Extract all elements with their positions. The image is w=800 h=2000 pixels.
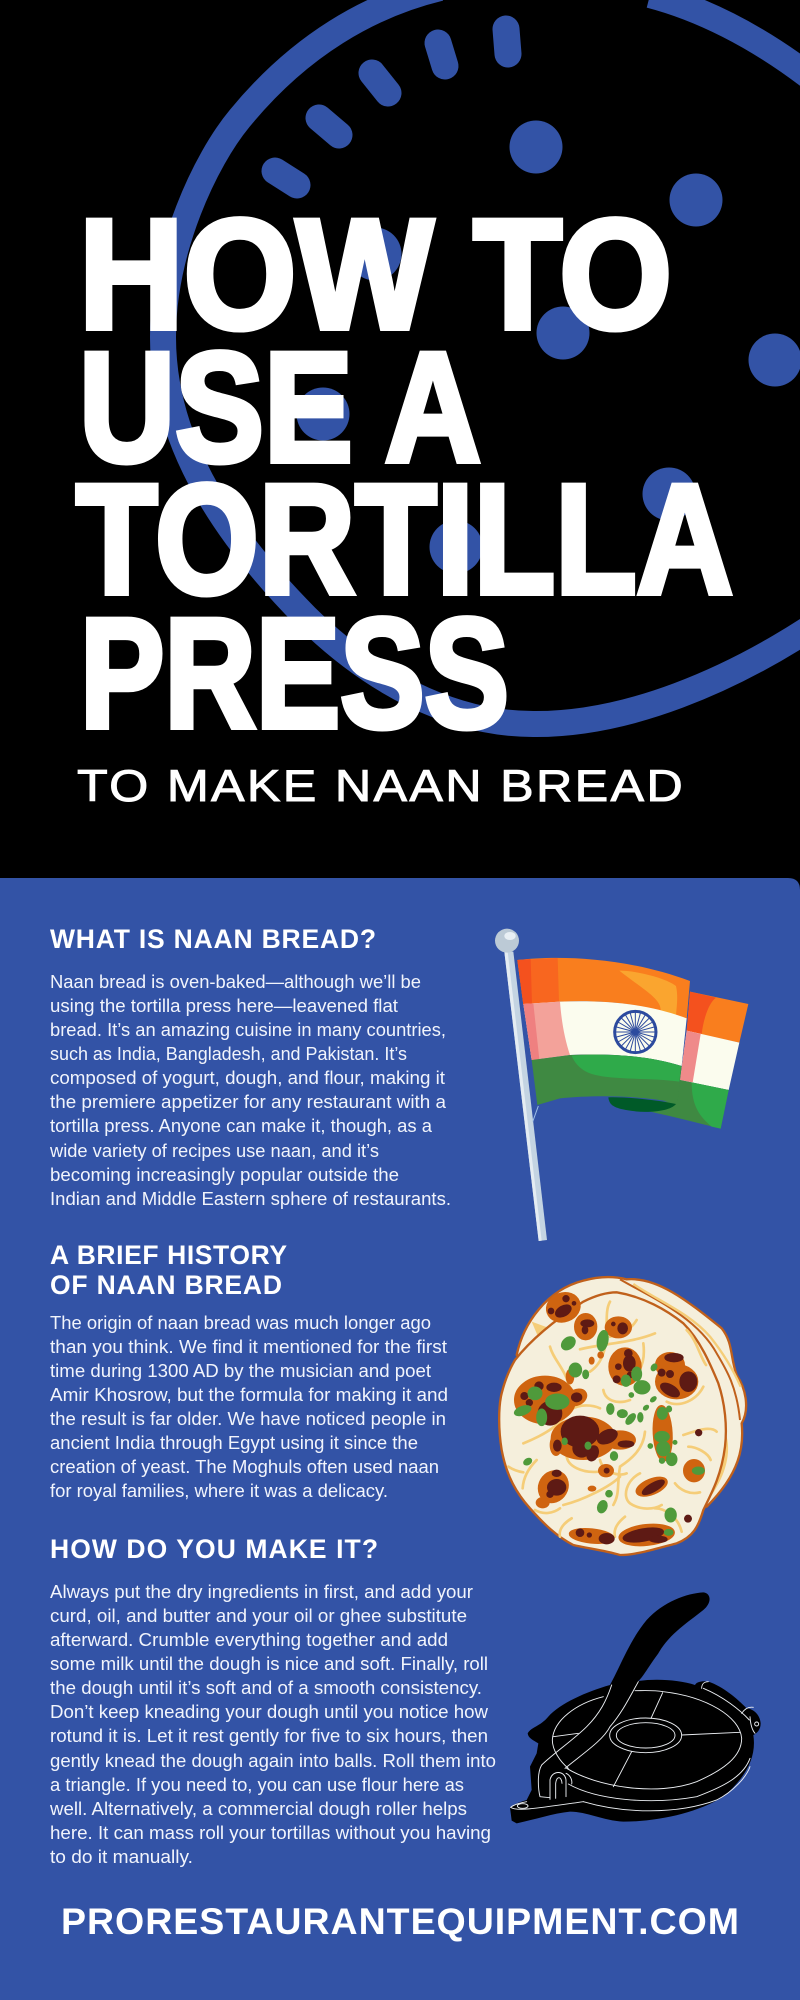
heading: a brief history of naan bread: A BRIEF HISTORY <box>50 1240 287 1270</box>
front layer of naan <box>499 1292 726 1555</box>
text block: what is naan bread: such as India, Bangladesh, and Pakistan. It’s <box>50 1043 407 1064</box>
text block: how do you make it: to do it manually. <box>50 1846 193 1867</box>
text block: what is naan bread: the premiere appetizer for any restaurant with a <box>50 1091 447 1112</box>
charred spots <box>515 1288 704 1548</box>
text block: brief history <box>50 1312 448 1501</box>
text block: how do you make it: gently knead the dough again into balls. Roll them into <box>50 1750 496 1771</box>
text block: what is naan bread <box>49 971 451 1209</box>
text block: how do you make it: here. It can mass roll your tortillas without you having <box>50 1822 491 1843</box>
text block: how do you make it: Always put the dry ingredients in first, and add your <box>50 1581 473 1602</box>
text block: what is naan bread: using the tortilla press here—leavened flat <box>50 995 398 1016</box>
herb flecks <box>513 1330 704 1535</box>
blue content panel <box>0 878 800 2000</box>
text block: what is naan bread: Indian and Middle Eastern sphere of restaurants. <box>50 1188 451 1209</box>
text block: brief history: Amir Khosrow, but the formula for making it and <box>50 1384 448 1405</box>
section: how do you make it <box>49 1534 496 1867</box>
text block: brief history: The origin of naan bread was much longer ago <box>50 1312 431 1333</box>
text block: how do you make it: some milk until the dough is nice and soft. Finally, roll <box>50 1653 488 1674</box>
back fold of flag <box>687 992 748 1043</box>
section: brief history <box>50 1240 448 1501</box>
text block: brief history: creation of yeast. The Moghuls often used naan <box>50 1456 439 1477</box>
text block: brief history: the result is far older. We have noticed people in <box>50 1408 446 1429</box>
header background <box>0 0 800 890</box>
subtitle: TO MAKE NAAN BREAD <box>77 762 685 811</box>
text block: what is naan bread: tortilla press. Anyone can make it, though, as a <box>50 1115 433 1136</box>
text block: brief history: for royal families, where it was a delicacy. <box>50 1480 388 1501</box>
title: USE A <box>79 321 481 495</box>
text block: what is naan bread: Naan bread is oven-baked—although we’ll be <box>50 971 421 992</box>
text block: how do you make it: Don’t keep kneading your dough until you notice how <box>50 1701 489 1722</box>
icon: naan bread <box>499 1277 746 1555</box>
dark burnt patches <box>521 1296 701 1544</box>
press silhouette <box>510 1592 761 1823</box>
title: HOW TO <box>79 188 672 362</box>
text block: brief history: ancient India through Egypt using it since the <box>50 1432 418 1453</box>
header decoration: ring, dashes and dots <box>163 0 800 724</box>
text block: brief history: than you think. We find it mentioned for the first <box>50 1336 447 1357</box>
ashoka chakra <box>615 1011 656 1053</box>
text block: how do you make it: the dough until it’s soft and of a smooth consistency. <box>50 1677 482 1698</box>
text block: what is naan bread: bread. It’s an amazing cuisine in many countries, <box>50 1019 446 1040</box>
text block: how do you make it: well. Alternatively, a commercial dough roller helps <box>49 1798 467 1819</box>
heading: what is naan bread: WHAT IS NAAN BREAD? <box>50 924 376 954</box>
text block: what is naan bread: composed of yogurt, dough, and flour, making it <box>50 1067 445 1088</box>
text block: how do you make it <box>49 1581 496 1867</box>
icon: indian flag <box>495 929 748 1241</box>
flagpole <box>504 952 547 1241</box>
icon: tortilla press <box>510 1592 761 1823</box>
text block: what is naan bread: becoming increasingly popular outside the <box>50 1164 399 1185</box>
text block: how do you make it: curd, oil, and butter and your oil or ghee substitute <box>50 1605 467 1626</box>
heading: a brief history of naan bread: OF NAAN BREAD <box>50 1270 282 1300</box>
text block: brief history: time during 1300 AD by the musician and poet <box>50 1360 431 1381</box>
text block: how do you make it: rotund it is. Let it rest gently for five to six hours, then <box>50 1725 488 1746</box>
title: PRESS <box>80 587 509 761</box>
title <box>76 188 733 761</box>
heading: how do you make it: HOW DO YOU MAKE IT? <box>50 1534 378 1564</box>
dough squiggles <box>508 1302 717 1537</box>
text block: how do you make it: afterward. Crumble everything together and add <box>50 1629 448 1650</box>
section: what is naan bread <box>49 924 451 1209</box>
text block: how do you make it: a triangle. If you need to, you can use flour here as <box>50 1774 464 1795</box>
press line details <box>511 1682 759 1811</box>
front of flag <box>517 958 690 1019</box>
text block: what is naan bread: wide variety of recipes use naan, and it’s <box>49 1140 379 1161</box>
footer url: PRORESTAURANTEQUIPMENT.COM <box>61 1900 739 1942</box>
back layer of naan <box>517 1277 746 1507</box>
heading: a brief history of naan bread <box>50 1240 287 1300</box>
